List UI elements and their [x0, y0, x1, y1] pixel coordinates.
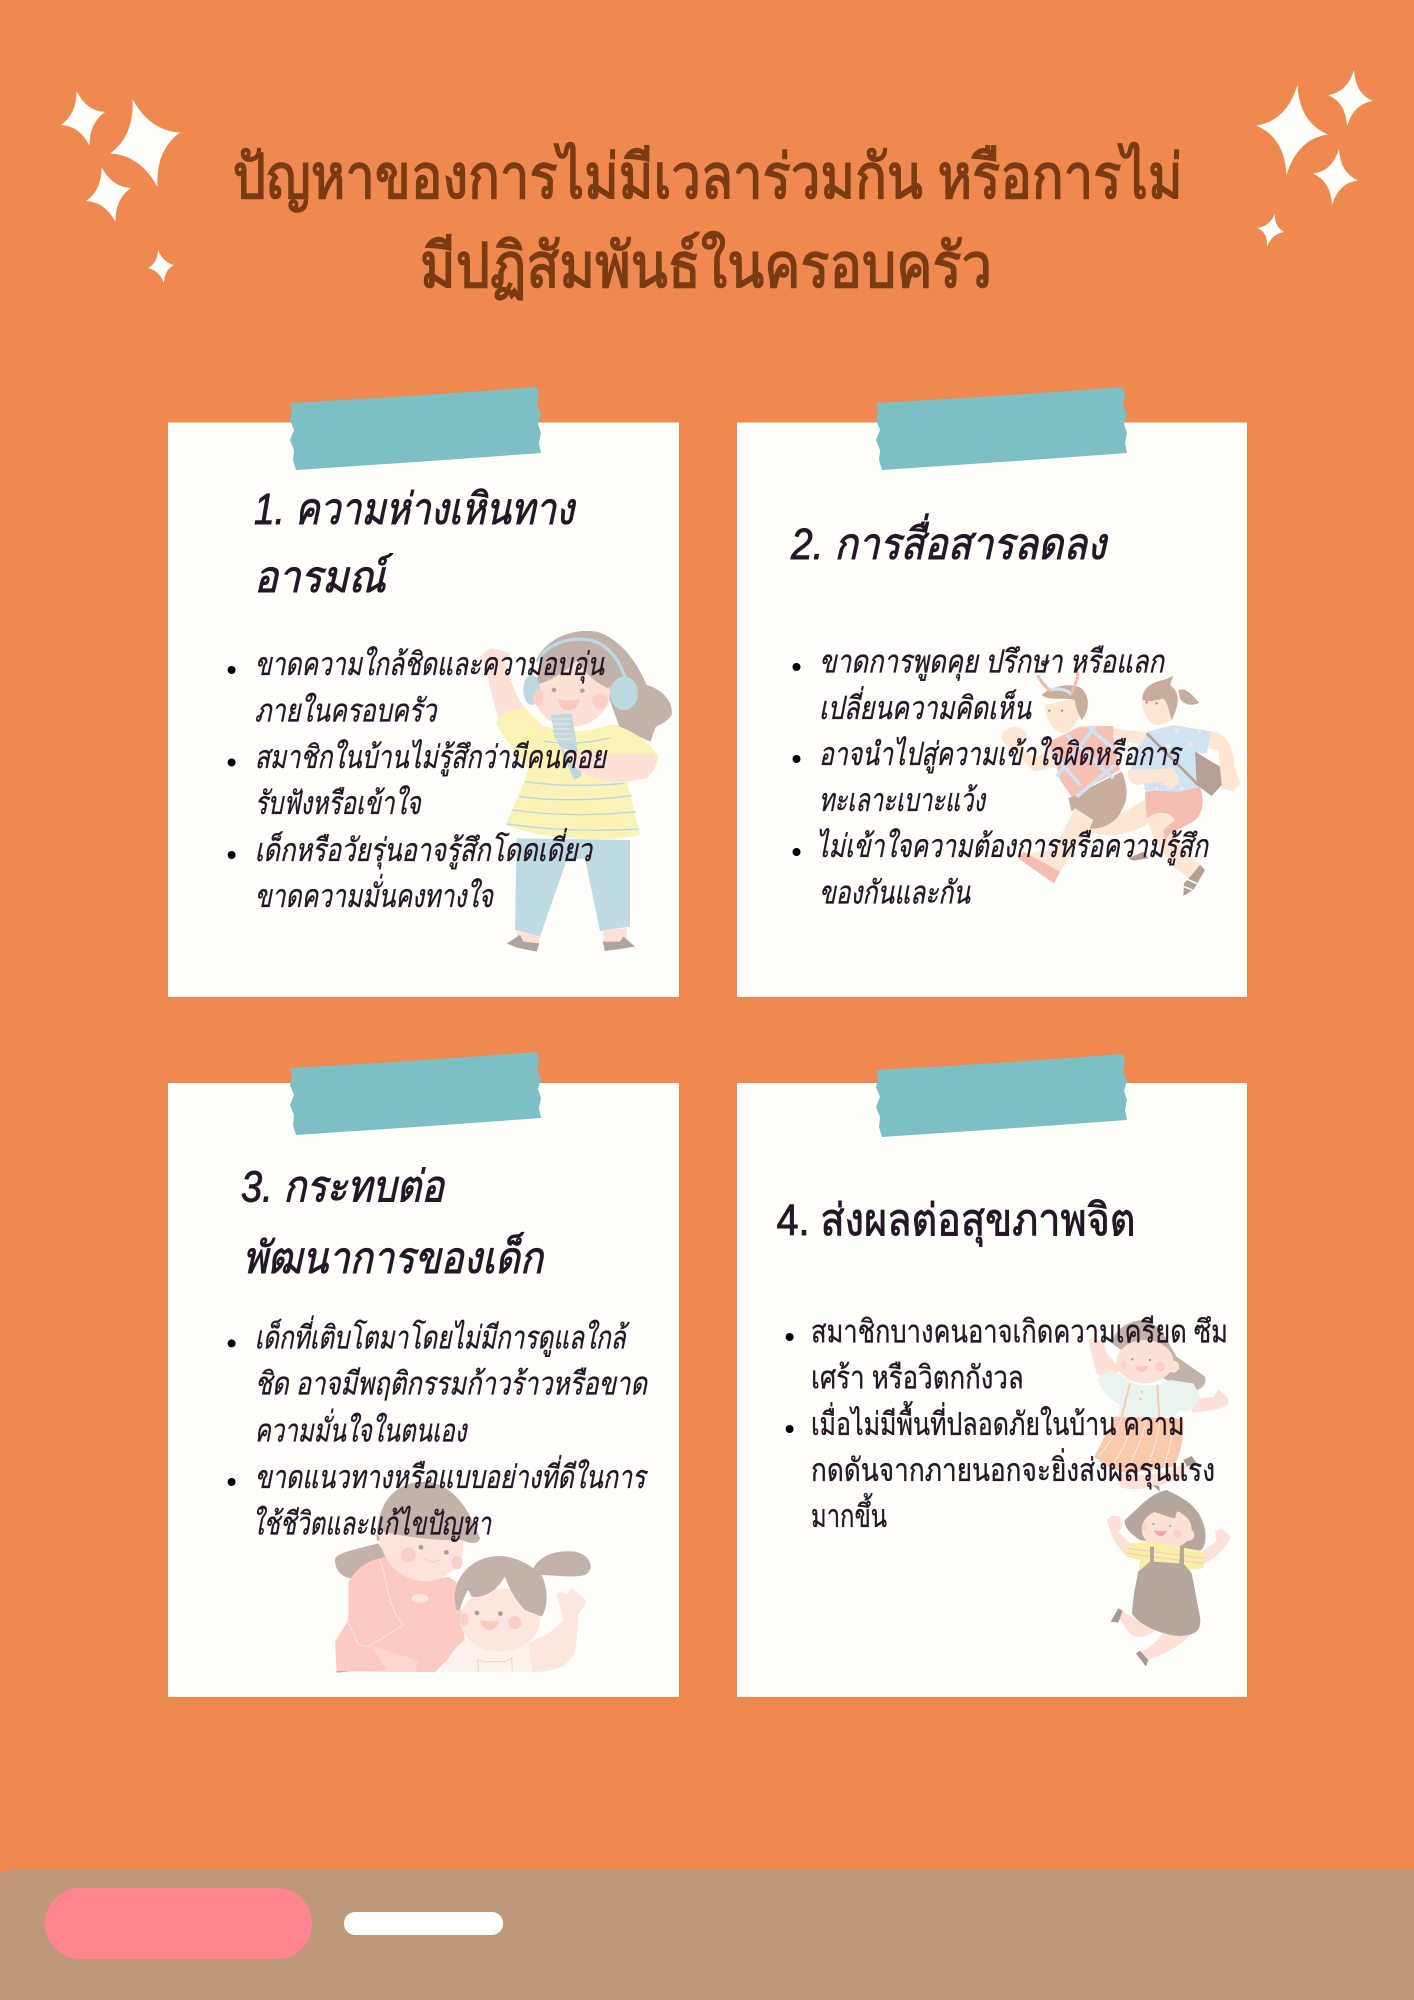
card 1 paper	[168, 422, 679, 997]
card 3 bullet list: ใช้ชีวิตและแก้ไขปัญหา	[252, 1505, 492, 1542]
card 1 heading: อารมณ์	[254, 553, 394, 602]
illustration: mother and child	[335, 1482, 591, 1673]
title: มีปฏิสัมพันธ์ในครอบครัว	[420, 231, 992, 301]
card 1 bullet list: รับฟังหรือเข้าใจ	[255, 785, 422, 821]
card 3 heading: พัฒนาการของเด็ก	[243, 1232, 545, 1283]
card 3 bullet list	[228, 1316, 649, 1542]
card 1 bullet list: ขาดความใกล้ชิดและความอบอุ่น	[255, 646, 605, 684]
card 2 bullet list: ของกันและกัน	[819, 874, 971, 910]
panel: card 3 child development	[168, 1083, 679, 1697]
illustration: two children running	[1002, 672, 1241, 896]
title: ปัญหาของการไม่มีเวลาร่วมกัน หรือการไม่	[233, 142, 1183, 212]
footer band	[0, 1869, 1414, 2000]
card 4 bullet list: มากขึ้น	[811, 1493, 887, 1534]
panel: card 4 mental health	[737, 1083, 1247, 1697]
tape: card 4	[876, 1054, 1127, 1137]
card 4 paper	[737, 1083, 1247, 1697]
tape: card 2	[876, 387, 1127, 470]
card 1 bullet list: ขาดความมั่นคงทางใจ	[255, 874, 494, 914]
card 4 bullet list: กดดันจากภายนอกจะยิ่งส่งผลรุนแรง	[811, 1448, 1215, 1490]
card 1 heading	[254, 485, 577, 602]
card 1 heading: 1. ความห่างเหินทาง	[254, 485, 577, 534]
card 4 bullet list: เศร้า หรือวิตกกังวล	[811, 1360, 1024, 1396]
card 1 bullet list	[228, 646, 608, 914]
card 4 bullet list: เมื่อไม่มีพื้นที่ปลอดภัยในบ้าน ความ	[811, 1401, 1184, 1442]
card 1 bullet list: สมาชิกในบ้านไม่รู้สึกว่ามีคนคอย	[255, 739, 608, 777]
tape: card 1	[290, 387, 541, 470]
card 2 heading: 2. การสื่อสารลดลง	[790, 513, 1109, 569]
panel: card 1 emotional distance	[168, 422, 679, 997]
card 2 paper	[737, 422, 1247, 997]
footer white pill	[344, 1912, 503, 1935]
card 2 bullet list	[792, 644, 1209, 910]
panel: card 2 reduced communication	[737, 422, 1247, 997]
card 3 bullet list: เด็กที่เติบโตมาโดยไม่มีการดูแลใกล้	[255, 1316, 630, 1358]
sparkles right	[1250, 67, 1376, 248]
card 2 bullet list: ทะเลาะเบาะแว้ง	[819, 782, 987, 818]
card 2 bullet list: ขาดการพูดคุย ปรึกษา หรือแลก	[819, 644, 1165, 682]
card 4 heading: 4. ส่งผลต่อสุขภาพจิต	[776, 1196, 1136, 1247]
card 3 bullet list: ขาดแนวทางหรือแบบอย่างที่ดีในการ	[255, 1455, 648, 1495]
card 4 bullet list	[786, 1314, 1228, 1534]
card 3 heading	[241, 1162, 545, 1283]
card 2 bullet list: เปลี่ยนความคิดเห็น	[819, 686, 1032, 726]
tape: card 3	[290, 1052, 541, 1135]
illustration: girl singing with headphones	[480, 631, 672, 952]
card 3 heading: 3. กระทบต่อ	[241, 1162, 445, 1212]
title	[233, 142, 1183, 301]
card 1 bullet list: เด็กหรือวัยรุ่นอาจรู้สึกโดดเดี่ยว	[255, 828, 594, 870]
illustration: two girls jumping	[1088, 1320, 1231, 1667]
card 3 bullet list: ชิด อาจมีพฤติกรรมก้าวร้าวหรือขาด	[255, 1366, 649, 1402]
card 3 bullet list: ความมั่นใจในตนเอง	[255, 1409, 468, 1449]
card 3 paper	[168, 1083, 679, 1697]
card 1 bullet list: ภายในครอบครัว	[255, 692, 438, 728]
card 4 bullet list: สมาชิกบางคนอาจเกิดความเครียด ซึม	[811, 1314, 1228, 1350]
card 2 bullet list: ไม่เข้าใจความต้องการหรือความรู้สึก	[816, 828, 1209, 866]
card 2 bullet list: อาจนำไปสู่ความเข้าใจผิดหรือการ	[819, 736, 1183, 774]
footer pink pill	[45, 1888, 312, 1959]
sparkles left	[54, 84, 192, 284]
